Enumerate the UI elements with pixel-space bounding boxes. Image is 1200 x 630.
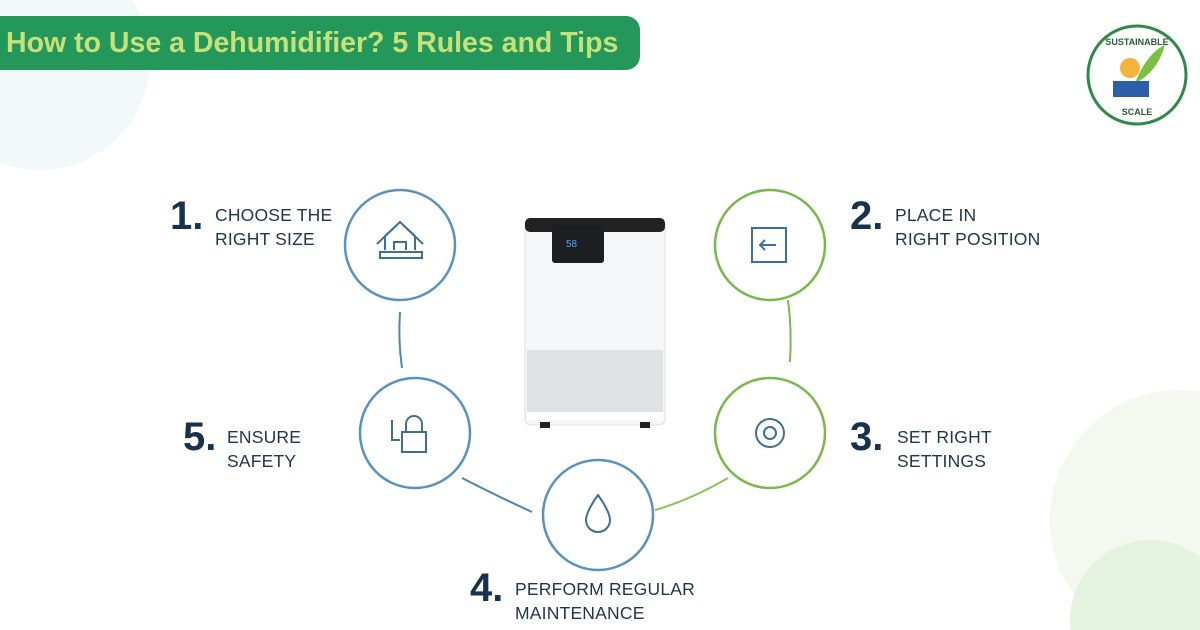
text: SETTINGS: [897, 451, 986, 471]
text: PLACE IN: [895, 205, 976, 225]
step 2: [850, 194, 1040, 249]
step 1: [170, 194, 332, 249]
text: RIGHT SIZE: [215, 229, 315, 249]
text: MAINTENANCE: [515, 603, 645, 623]
text: RIGHT POSITION: [895, 229, 1040, 249]
dehumidifier: 58: [566, 239, 578, 250]
text: CHOOSE THE: [215, 205, 332, 225]
text: 5.: [183, 415, 216, 459]
title: [0, 16, 640, 70]
text: 4.: [470, 566, 503, 610]
step 3: [850, 415, 992, 471]
text: SAFETY: [227, 451, 296, 471]
text: SET RIGHT: [897, 427, 992, 447]
logo: SUSTAINABLE: [1105, 37, 1169, 47]
logo: [1086, 24, 1188, 126]
text: ENSURE: [227, 427, 301, 447]
text: PERFORM REGULAR: [515, 579, 695, 599]
logo: SCALE: [1122, 107, 1152, 117]
step 5: [183, 415, 301, 471]
text: 2.: [850, 194, 883, 238]
title: How to Use a Dehumidifier? 5 Rules and Tips: [6, 27, 618, 59]
dehumidifier: [524, 218, 666, 428]
step 4: [470, 566, 695, 623]
text: 1.: [170, 194, 203, 238]
text: 3.: [850, 415, 883, 459]
